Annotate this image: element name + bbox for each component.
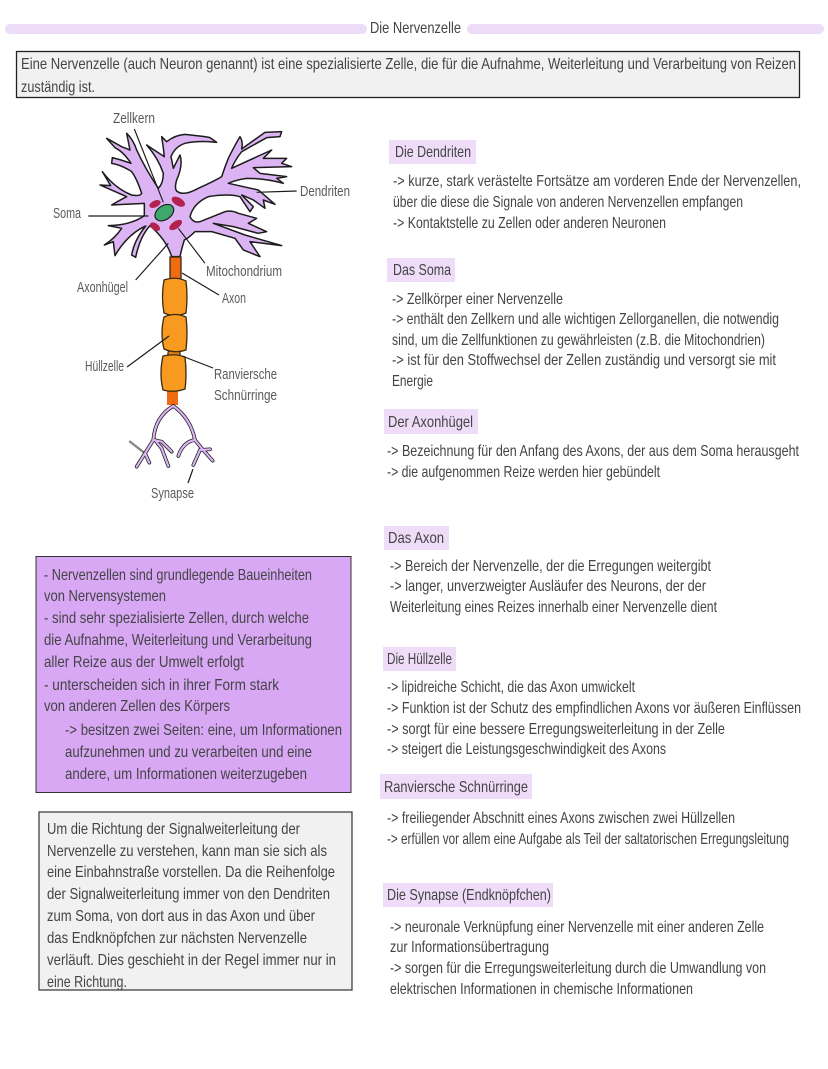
panel: Die Synapse bbox=[383, 883, 766, 998]
diagram labels: Zellkern bbox=[113, 110, 155, 127]
panel: Ranviersche Schnürringe: -> freiliegender Abschnitt eines Axons zwischen zwei Hüllzellen bbox=[387, 810, 735, 827]
diagram labels: Soma bbox=[53, 205, 81, 222]
neuron cell body and dendrites bbox=[88, 129, 297, 280]
panel: purple summary box: die Aufnahme, Weiterleitung und Verarbeitung bbox=[44, 632, 312, 649]
panel: Das Axon: -> langer, unverzweigter Ausläufer des Neurons, der der bbox=[390, 578, 707, 595]
diagram labels: Dendriten bbox=[300, 183, 350, 200]
diagram labels: Mitochondrium bbox=[206, 263, 282, 280]
panel: Das Soma: Das Soma bbox=[393, 262, 451, 279]
diagram labels: Schnürringe bbox=[214, 387, 277, 404]
panel: Die Dendriten bbox=[389, 140, 801, 232]
panel: Das Soma bbox=[387, 258, 779, 390]
panel: Das Soma: Energie bbox=[392, 373, 433, 390]
panel: purple summary box: aufzunehmen und zu verarbeiten und eine bbox=[65, 744, 312, 761]
panel: Ranviersche Schnürringe bbox=[380, 774, 789, 848]
title: Die Nervenzelle bbox=[370, 20, 461, 37]
panel: Die Synapse: Die Synapse (Endknöpfchen) bbox=[387, 887, 551, 904]
panel: Der Axonhügel: Der Axonhügel bbox=[388, 414, 473, 431]
panel: grey one-way street box: das Endknöpfchen zur nächsten Nervenzelle bbox=[47, 930, 307, 947]
panel: Die Dendriten: -> Kontaktstelle zu Zellen oder anderen Neuronen bbox=[393, 215, 666, 232]
panel: purple summary box: - unterscheiden sich in ihrer Form stark bbox=[44, 677, 280, 694]
title bbox=[5, 20, 824, 37]
panel: Die Synapse: elektrischen Informationen in chemische Informationen bbox=[390, 981, 693, 998]
axon and sheath cells bbox=[161, 257, 187, 405]
mitochondria bbox=[148, 195, 187, 233]
panel: grey one-way street box bbox=[39, 812, 352, 991]
intro definition box bbox=[16, 52, 800, 98]
panel: Der Axonhügel: -> die aufgenommen Reize werden hier gebündelt bbox=[387, 464, 660, 481]
panel: grey one-way street box: der Signalweiterleitung immer von den Dendriten bbox=[47, 886, 330, 903]
nucleus bbox=[152, 201, 177, 224]
panel: grey one-way street box: eine Einbahnstraße vorstellen. Da die Reihenfolge bbox=[47, 864, 335, 881]
panel: purple summary box bbox=[36, 556, 351, 792]
panel: grey one-way street box: zum Soma, von dort aus in das Axon und über bbox=[47, 908, 316, 925]
panel: purple summary box: andere, um Informationen weiterzugeben bbox=[65, 766, 307, 783]
panel: Die Hüllzelle: -> steigert die Leistungsgeschwindigkeit des Axons bbox=[387, 741, 666, 758]
panel: purple summary box: - Nervenzellen sind grundlegende Baueinheiten bbox=[44, 567, 312, 584]
panel: purple summary box: von anderen Zellen des Körpers bbox=[44, 698, 230, 715]
panel: grey one-way street box: verläuft. Dies geschieht in der Regel immer nur in bbox=[47, 952, 336, 969]
panel: Die Hüllzelle: Die Hüllzelle bbox=[387, 651, 452, 668]
panel: grey one-way street box: Nervenzelle zu verstehen, kann man sie sich als bbox=[47, 843, 327, 860]
panel: Die Hüllzelle bbox=[383, 647, 801, 758]
panel: Das Axon bbox=[384, 526, 717, 616]
leader lines upper bbox=[88, 129, 297, 280]
neuron diagram bbox=[53, 110, 350, 502]
diagram labels: Synapse bbox=[151, 485, 194, 502]
panel: Das Axon: Das Axon bbox=[388, 530, 444, 547]
panel: grey one-way street box: Um die Richtung der Signalweiterleitung der bbox=[47, 821, 301, 838]
panel: Die Dendriten: Die Dendriten bbox=[395, 144, 471, 161]
panel: purple summary box: - sind sehr spezialisierte Zellen, durch welche bbox=[44, 610, 309, 627]
diagram labels: Axon bbox=[222, 290, 246, 307]
panel: Das Axon: -> Bereich der Nervenzelle, der die Erregungen weitergibt bbox=[390, 558, 711, 575]
panel: Die Hüllzelle: -> lipidreiche Schicht, die das Axon umwickelt bbox=[387, 679, 635, 696]
panel: purple summary box: aller Reize aus der Umwelt erfolgt bbox=[44, 654, 244, 671]
leader lines lower bbox=[127, 273, 219, 483]
panel: Die Hüllzelle: -> sorgt für eine bessere Erregungsweiterleitung in der Zelle bbox=[387, 721, 725, 738]
diagram labels: Axonhügel bbox=[77, 279, 128, 296]
synapse terminal branches bbox=[130, 406, 213, 467]
panel: purple summary box: -> besitzen zwei Seiten: eine, um Informationen bbox=[65, 722, 342, 739]
panel: Die Synapse: zur Informationsübertragung bbox=[390, 939, 549, 956]
diagram labels: Hüllzelle bbox=[85, 358, 124, 375]
diagram labels bbox=[53, 110, 350, 502]
panel: Das Soma: -> Zellkörper einer Nervenzelle bbox=[392, 291, 563, 308]
panel: Das Axon: Weiterleitung eines Reizes innerhalb einer Nervenzelle dient bbox=[390, 599, 717, 616]
intro definition box: zuständig ist. bbox=[21, 79, 95, 96]
panel: Ranviersche Schnürringe: Ranviersche Schnürringe bbox=[384, 779, 528, 796]
diagram labels: Ranviersche bbox=[214, 366, 277, 383]
panel: grey one-way street box: eine Richtung. bbox=[47, 974, 127, 991]
panel: purple summary box: von Nervensystemen bbox=[44, 588, 166, 605]
panel: Der Axonhügel bbox=[384, 409, 799, 481]
